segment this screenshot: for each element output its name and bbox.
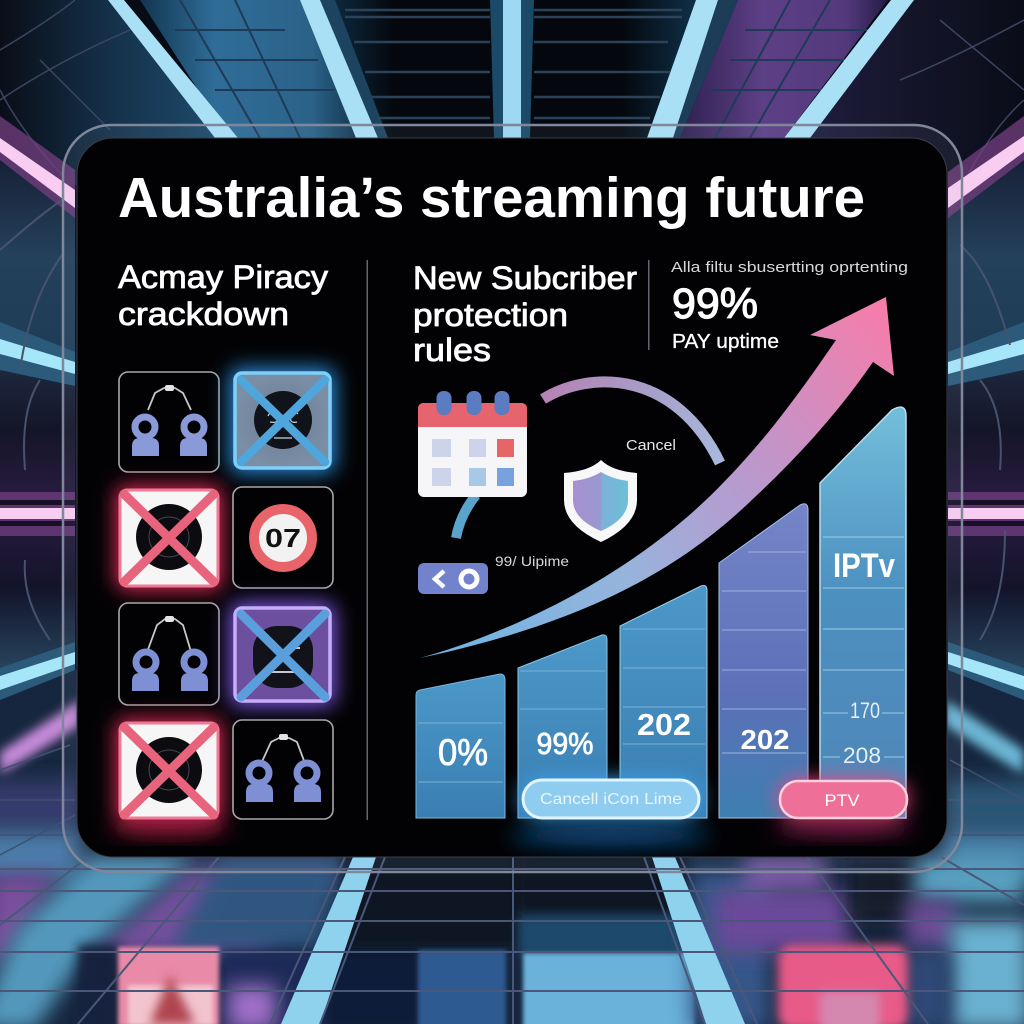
pill: PTV: PTV [824, 792, 860, 810]
pill: cancel online: Cancell iCon Lime [540, 791, 682, 808]
bar 2: 99%: 99% [536, 726, 594, 761]
tile: blue crossed disc [230, 368, 335, 473]
bar chart [416, 407, 906, 818]
tile: 07 badge: 07 [265, 523, 301, 553]
icon grid: piracy crackdown [116, 368, 335, 822]
pill: cancel online [522, 779, 700, 818]
floor with blurred reflections [0, 670, 1024, 1024]
label: Cancel: Cancel [626, 438, 676, 454]
heading: subscriber protection: protection [413, 297, 568, 333]
bar 5: IPTv: IPTv [833, 547, 895, 585]
arc gauge [543, 382, 720, 463]
pill: PTV [779, 780, 908, 818]
title: Australia’s streaming future [118, 166, 865, 230]
left reflection bands [0, 875, 60, 965]
side walls with neon strips [0, 116, 1024, 704]
bar 2: 99% [518, 635, 607, 818]
stat: 99% PAY uptime: 99% [672, 280, 758, 328]
heading: subscriber protection [413, 260, 637, 368]
glass frame [63, 125, 962, 872]
heading: piracy crackdown: crackdown [118, 296, 289, 332]
bar 3: 202: 202 [637, 707, 691, 742]
tile: pink crossed disc 2 [116, 719, 222, 822]
tile: pink crossed disc 1 [116, 486, 222, 590]
stat: 99% PAY uptime [671, 259, 908, 353]
divider: left column [366, 260, 368, 820]
heading: subscriber protection: New Subcriber [413, 260, 637, 296]
tile: purple crossed disc [230, 603, 335, 706]
heading: piracy crackdown [118, 259, 328, 332]
heading: subscriber protection: rules [413, 332, 491, 368]
divider: stat [648, 260, 650, 350]
ceiling panels and light strips [108, 0, 914, 138]
icon: shield [564, 460, 637, 542]
bar 4: 202 [719, 504, 808, 818]
panel floor glow [109, 820, 913, 846]
stat: 99% PAY uptime: PAY uptime [672, 331, 779, 353]
tile: handcuffs 1 [119, 372, 219, 472]
tile: handcuffs 2 [119, 603, 219, 705]
bar 1: 0% [416, 674, 505, 818]
bar 5: IPTv: 208 [843, 743, 881, 768]
label: uptime: 99/ Uipime [495, 553, 569, 569]
heading: piracy crackdown: Acmay Piracy [118, 259, 328, 295]
icon: control pill [418, 563, 488, 594]
tile: 07 badge [233, 487, 333, 588]
bar 5: IPTv [820, 407, 906, 818]
ceiling corner panels [0, 0, 1024, 190]
growth arrow [420, 297, 894, 658]
bar 4: 202: 202 [740, 724, 790, 755]
main black panel [77, 138, 947, 857]
bar 3: 202 [620, 586, 707, 818]
tile: handcuffs 3 [233, 720, 333, 819]
bar 5: IPTv: 170 [850, 698, 880, 723]
stat: 99% PAY uptime: Alla filtu sbusertting oprtenting [671, 259, 908, 276]
icon: calendar [418, 391, 527, 538]
bar 1: 0%: 0% [438, 732, 488, 773]
